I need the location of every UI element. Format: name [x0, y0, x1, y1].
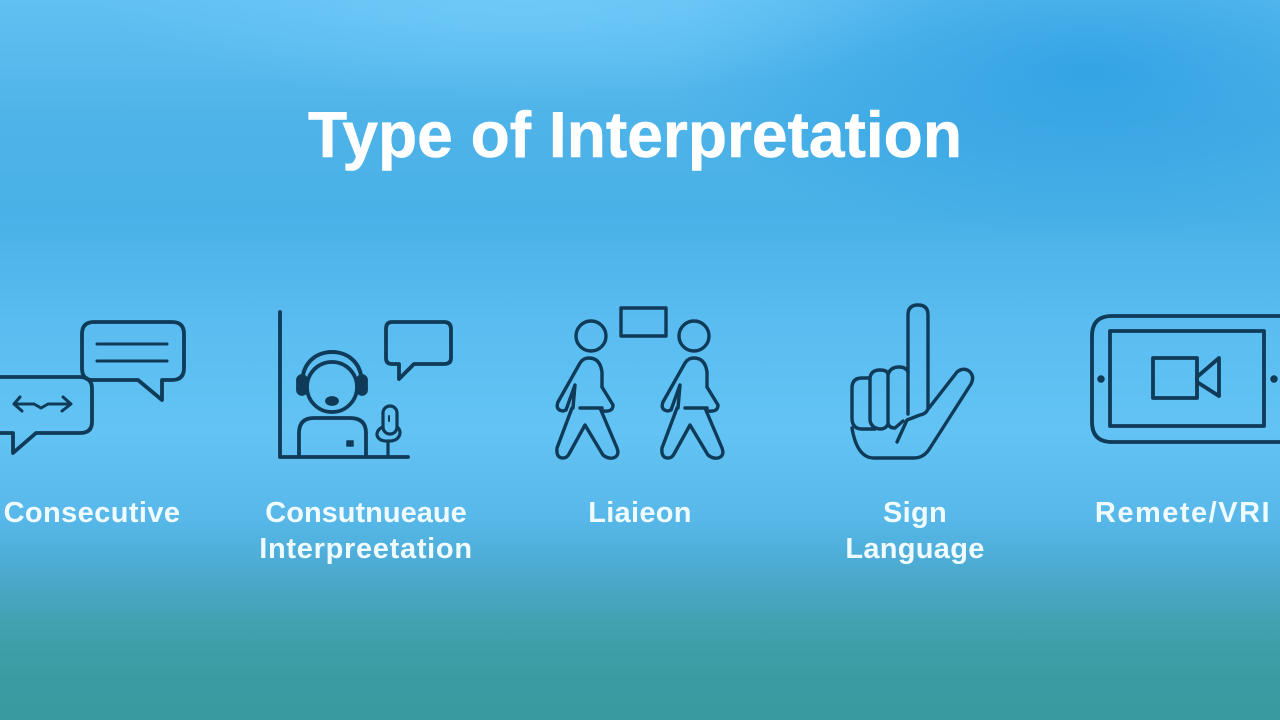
icon: consecutive speech bubbles: [0, 322, 184, 453]
label: sign language: [845, 497, 985, 565]
icon: interpreter in booth: [280, 312, 451, 457]
label: consecutive interpretation: Interpreetation: [259, 533, 473, 565]
label: sign language: Language: [845, 533, 985, 565]
label: sign language: Sign: [883, 497, 947, 529]
label: remote/VRI: Remete/VRI: [1095, 497, 1271, 529]
label: liaison: Liaieon: [588, 497, 692, 529]
icon: two walking people with card: [557, 308, 723, 458]
icon: remote video tablet: [1092, 316, 1280, 442]
title: Type of Interpretation: [308, 98, 962, 171]
label: consecutive interpretation: Consutnueaue: [265, 497, 467, 529]
label: consecutive interpretation: [259, 497, 473, 565]
icon: sign language hand: [852, 305, 973, 458]
label: consecutive: Consecutive: [4, 497, 180, 529]
